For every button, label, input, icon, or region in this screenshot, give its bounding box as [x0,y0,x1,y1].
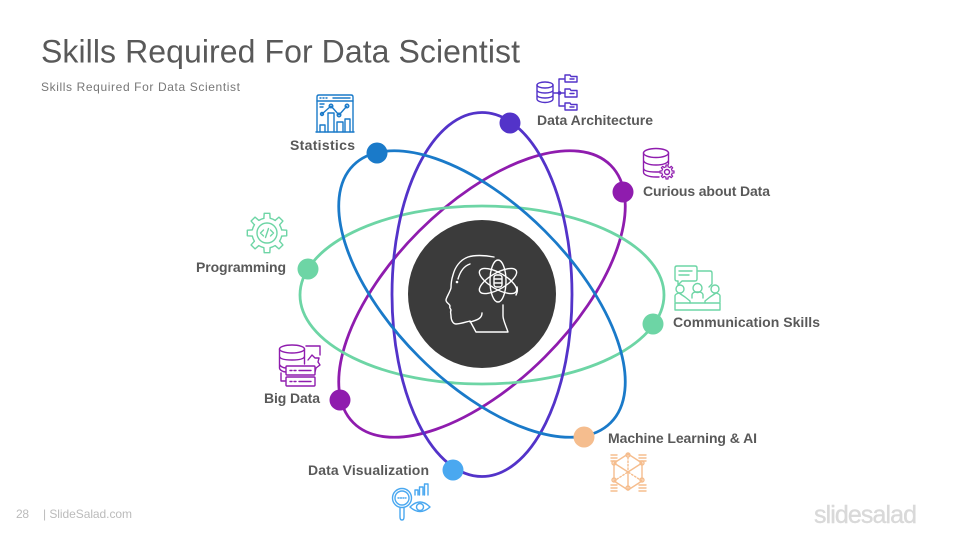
orbit rings [290,102,674,486]
footer credit: | SlideSalad.com [43,507,132,521]
node: Communication Skills [642,266,820,334]
node: Data Visualization [308,460,464,520]
icon: team meeting [675,266,720,310]
node: Programming: Programming [196,259,286,275]
ring: purple [290,102,674,486]
node: Programming [196,213,318,280]
node: Machine Learning & AI [574,426,757,491]
center circle with head icon [408,220,556,368]
node: Statistics [290,95,388,164]
title: Skills Required For Data Scientist [41,34,520,70]
ring: indigo [392,112,572,476]
ring: blue [290,102,674,486]
node: Statistics: Statistics [290,137,355,153]
node: Data Architecture [500,75,653,134]
node: Big Data [264,345,350,410]
logo wordmark: slidesalad [814,501,917,529]
subtitle: Skills Required For Data Scientist [41,80,241,94]
node: Machine Learning & AI: Machine Learning & AI [608,430,757,446]
node: Communication Skills: Communication Skills [673,314,820,330]
icon: database with gear [644,148,674,179]
node: Data Visualization: Data Visualization [308,462,429,478]
icon: machine learning cube [611,453,646,491]
node: Big Data: Big Data [264,390,320,406]
node: Data Architecture: Data Architecture [537,112,653,128]
icon: database with servers and gear [280,345,320,386]
node: Curious about Data [612,148,770,202]
node: Curious about Data: Curious about Data [643,183,770,199]
icon: database and folders [537,75,577,110]
icon: statistics dashboard [316,95,354,132]
icon: gear with code brackets [247,213,287,253]
page number: 28 [16,507,29,521]
icon: magnifier with chart and eye [392,484,430,520]
icon: head with atom [446,256,520,332]
ring: green [300,206,664,384]
